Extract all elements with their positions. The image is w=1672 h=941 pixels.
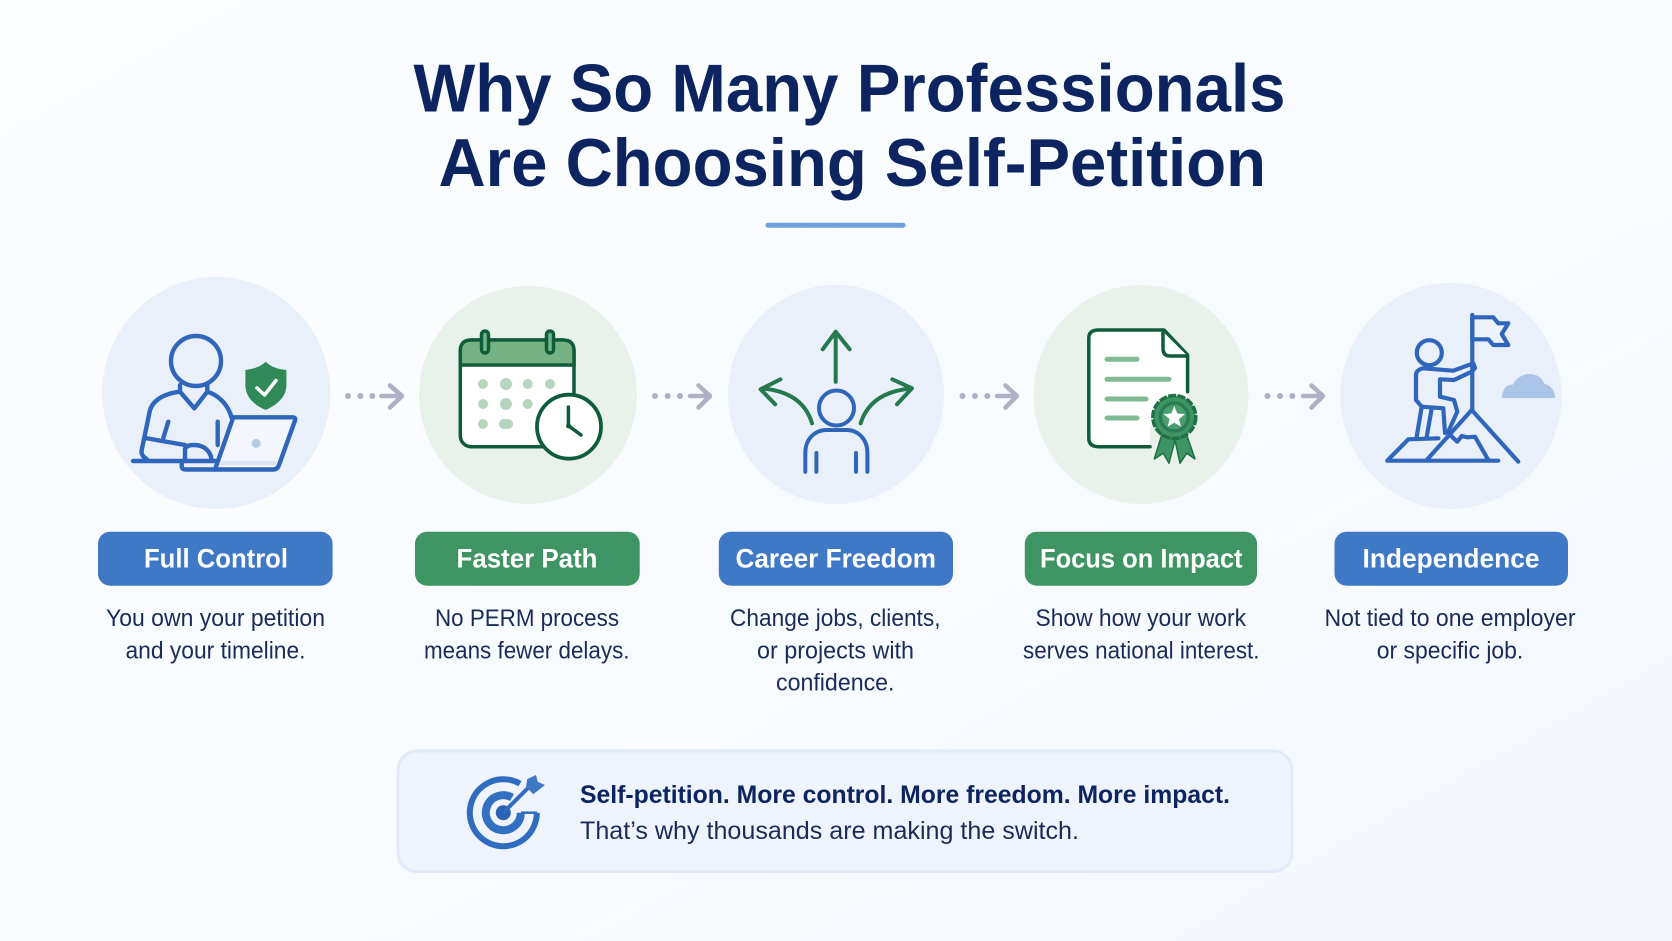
label: faster path [415,532,640,586]
icon: target with arrow [470,775,545,846]
title underline [766,223,906,228]
icon: document [1089,330,1188,447]
text: career freedom [730,605,940,696]
label: focus on impact [1025,532,1257,586]
label: full control [98,532,333,586]
text: focus on impact: Show how your work [1036,605,1247,632]
arrow 1 [345,386,402,408]
label: career freedom: Career Freedom [736,544,936,574]
callout text [580,781,1230,845]
icon: three direction arrows [761,332,912,423]
text: focus on impact: serves national interest. [1023,638,1260,664]
icon: person [805,390,867,472]
step 5: independence [1324,283,1576,664]
text: faster path [424,605,630,664]
text: independence: Not tied to one employer [1324,605,1576,632]
text: faster path: No PERM process [435,605,619,632]
step 1: full control [98,277,333,664]
icon: climber with flag on mountain [1387,315,1518,462]
icon: person at laptop [133,336,295,470]
text: independence [1324,605,1576,664]
text: independence: or specific job. [1377,638,1523,664]
icon circle: career freedom [728,285,944,504]
label: career freedom [719,532,953,586]
label: faster path: Faster Path [456,544,598,574]
label: focus on impact: Focus on Impact [1040,544,1243,574]
callout text: Self-petition. More control. More freedom. More impact. [580,781,1230,809]
text: career freedom: confidence. [776,670,894,696]
callout panel [398,751,1292,872]
label: full control: Full Control [144,544,288,574]
arrow 4 [1264,386,1323,408]
arrow 3 [960,386,1017,408]
icon: shield check [245,362,286,410]
icon: laptop screen details [221,439,276,465]
icon: award ribbon [1153,396,1196,463]
text: full control: You own your petition [106,605,325,632]
title: Are Choosing Self-Petition [438,125,1266,201]
title: Why So Many Professionals [414,50,1286,126]
title [414,50,1286,201]
label: independence: Independence [1362,544,1540,574]
icon circle: full control [102,277,330,509]
text: faster path: means fewer delays. [424,638,630,664]
icon circle: independence [1340,283,1562,509]
step 2: faster path [415,286,640,664]
text: career freedom: or projects with [757,638,914,664]
arrow 2 [652,386,710,408]
text: focus on impact [1023,605,1260,664]
label: independence [1334,532,1568,586]
icon circle: focus on impact [1034,285,1248,504]
icon: cloud [1502,374,1555,398]
callout text: That’s why thousands are making the switch. [580,817,1079,845]
text: full control [106,605,325,664]
step 4: focus on impact [1023,285,1260,664]
icon: clock [537,395,601,459]
icon: calendar [460,331,574,447]
step 3: career freedom [719,285,953,696]
icon circle: faster path [419,286,637,504]
text: full control: and your timeline. [126,638,306,664]
text: career freedom: Change jobs, clients, [730,605,940,632]
